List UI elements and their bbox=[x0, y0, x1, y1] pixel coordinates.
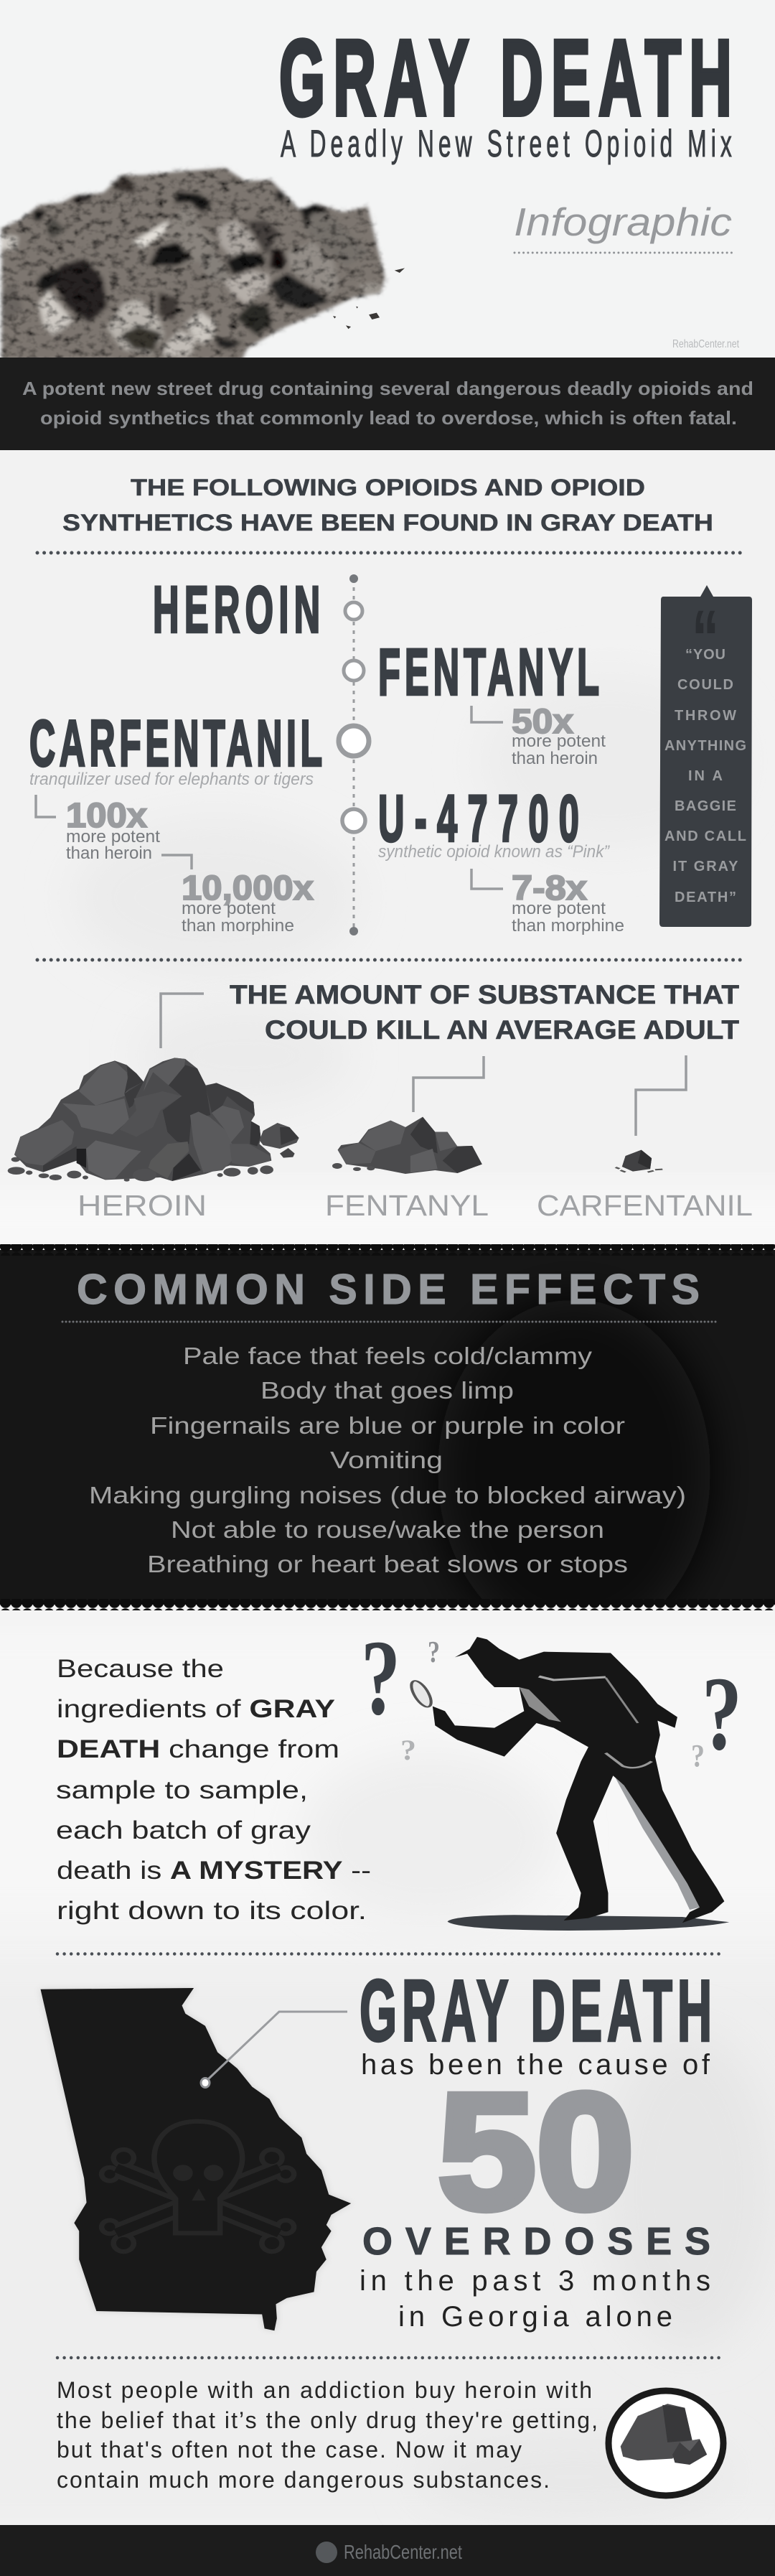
quote callout: COULD bbox=[677, 677, 733, 693]
text: closing paragraph: Most people with an addiction buy heroin with bbox=[57, 2377, 592, 2403]
heading: lethal amounts: COULD KILL AN AVERAGE ADULT bbox=[265, 1015, 739, 1045]
side effects list bbox=[89, 1343, 686, 1577]
image: rubble pile photo bbox=[0, 167, 405, 361]
icon: question marks: ? bbox=[691, 1738, 705, 1773]
rock labels bbox=[78, 1189, 753, 1222]
quote callout: DEATH” bbox=[675, 890, 736, 905]
drug: U-47700 bbox=[378, 781, 624, 935]
quote callout: THROW bbox=[675, 708, 736, 724]
drug: U-47700: synthetic opioid known as “Pink” bbox=[378, 842, 610, 862]
quote callout: ANYTHING bbox=[664, 738, 746, 754]
quote callout: “ bbox=[692, 594, 719, 683]
text: mystery paragraph: DEATH change from bbox=[57, 1735, 339, 1763]
small watermark: RehabCenter.net bbox=[672, 338, 739, 350]
subtitle: A Deadly New Street Opioid Mix bbox=[281, 123, 732, 165]
footer: RehabCenter.net bbox=[344, 2541, 462, 2563]
icon: question marks bbox=[361, 1618, 742, 1773]
quote callout: BAGGIE bbox=[675, 798, 736, 814]
drug: fentanyl bbox=[378, 635, 606, 768]
heading: lethal amounts: THE AMOUNT OF SUBSTANCE THAT bbox=[230, 980, 739, 1009]
intro banner: A potent new street drug containing several dangerous deadly opioids and bbox=[22, 378, 753, 399]
dotted rule under label bbox=[515, 251, 732, 254]
text: mystery paragraph: Because the bbox=[57, 1655, 224, 1683]
infographic label: Infographic bbox=[514, 200, 732, 244]
drug: carfentanil: more potent bbox=[182, 899, 276, 918]
drug: U-47700: U-47700 bbox=[378, 781, 579, 855]
stat: gray death overdoses: OVERDOSES bbox=[362, 2220, 710, 2263]
side effects list: Not able to rouse/wake the person bbox=[171, 1516, 604, 1543]
text: closing paragraph: but that's often not the case. Now it may bbox=[57, 2437, 522, 2463]
drug: carfentanil: than heroin bbox=[66, 844, 152, 863]
drug: fentanyl: than heroin bbox=[512, 749, 598, 768]
intro banner bbox=[0, 358, 775, 450]
drug: carfentanil: than morphine bbox=[182, 916, 294, 935]
stat: gray death overdoses: in the past 3 months bbox=[360, 2265, 710, 2297]
stat: gray death overdoses bbox=[360, 1961, 712, 2333]
stat: gray death overdoses: GRAY DEATH bbox=[360, 1961, 712, 2060]
title: GRAY DEATH bbox=[279, 17, 732, 138]
text: mystery paragraph: each batch of gray bbox=[56, 1816, 311, 1844]
drug: U-47700: than morphine bbox=[512, 916, 624, 935]
side effects list: Breathing or heart beat slows or stops bbox=[147, 1551, 628, 1577]
quote callout: IN A bbox=[688, 768, 723, 784]
icon: detective silhouette bbox=[408, 1637, 729, 1931]
text: mystery paragraph: right down to its color. bbox=[57, 1897, 367, 1925]
drug: carfentanil bbox=[29, 707, 322, 935]
rock labels: CARFENTANIL bbox=[537, 1189, 753, 1222]
side effects list: Body that goes limp bbox=[260, 1377, 514, 1404]
text: mystery paragraph: death is A MYSTERY -- bbox=[57, 1857, 371, 1885]
stat: gray death overdoses: in Georgia alone bbox=[398, 2301, 672, 2333]
drug: carfentanil: tranquilizer used for elephants or tigers bbox=[29, 770, 314, 789]
stat: gray death overdoses: 50 bbox=[438, 2059, 634, 2244]
side effects list: Pale face that feels cold/clammy bbox=[183, 1343, 593, 1369]
drug: U-47700: more potent bbox=[512, 899, 606, 918]
text: mystery paragraph: sample to sample, bbox=[56, 1776, 308, 1804]
quote callout bbox=[659, 585, 752, 927]
timeline bbox=[339, 574, 369, 935]
panel: common side effects bbox=[0, 1244, 775, 1644]
side effects heading: COMMON SIDE EFFECTS bbox=[77, 1266, 700, 1313]
drug: fentanyl: more potent bbox=[512, 732, 606, 751]
icon: question marks: ? bbox=[702, 1655, 742, 1772]
stat: gray death overdoses: has been the cause of bbox=[361, 2049, 710, 2081]
heading: opioids found: SYNTHETICS HAVE BEEN FOUND IN GRAY DEATH bbox=[62, 510, 713, 536]
intro banner: opioid synthetics that commonly lead to overdose, which is often fatal. bbox=[40, 407, 737, 429]
footer bbox=[0, 2525, 775, 2576]
text: mystery paragraph bbox=[56, 1655, 371, 1925]
rock pile: heroin bbox=[8, 1058, 299, 1182]
icon: footer logo bbox=[316, 2542, 337, 2563]
drug: fentanyl: FENTANYL bbox=[378, 635, 599, 709]
icon: question marks: ? bbox=[428, 1636, 440, 1669]
heading: opioids found bbox=[62, 475, 713, 536]
quote callout: AND CALL bbox=[664, 829, 746, 844]
drug: fentanyl: 50x bbox=[512, 703, 573, 741]
drug: carfentanil: 100x bbox=[66, 797, 147, 835]
text: closing paragraph bbox=[57, 2377, 598, 2493]
rock labels: FENTANYL bbox=[325, 1189, 489, 1222]
text: closing paragraph: contain much more dangerous substances. bbox=[57, 2467, 550, 2493]
rock labels: HEROIN bbox=[78, 1189, 207, 1222]
drug: carfentanil: CARFENTANIL bbox=[29, 707, 322, 780]
drug: carfentanil: more potent bbox=[66, 827, 160, 846]
side effects list: Making gurgling noises (due to blocked airway) bbox=[89, 1482, 686, 1508]
quote callout: “YOU bbox=[685, 647, 725, 663]
icon: question marks: ? bbox=[400, 1734, 416, 1766]
side effects list: Fingernails are blue or purple in color bbox=[150, 1412, 625, 1439]
drug: U-47700: 7-8x bbox=[512, 869, 587, 907]
rock: carfentanil bbox=[616, 1150, 662, 1172]
rock pile: fentanyl bbox=[332, 1117, 482, 1174]
side effects list: Vomiting bbox=[330, 1447, 443, 1473]
text: mystery paragraph: ingredients of GRAY bbox=[57, 1695, 335, 1723]
text: closing paragraph: the belief that it’s the only drug they're getting, bbox=[57, 2407, 598, 2433]
map: Georgia with skull bbox=[40, 1988, 351, 2330]
icon: skull and crossbones bbox=[99, 2122, 296, 2254]
drug: heroin: HEROIN bbox=[153, 572, 320, 646]
icon: coal badge bbox=[609, 2391, 723, 2496]
callout line and map pin bbox=[201, 2012, 347, 2088]
drug: carfentanil: 10,000x bbox=[182, 869, 314, 907]
quote callout: IT GRAY bbox=[673, 859, 738, 874]
connector lines bbox=[161, 994, 686, 1136]
icon: question marks: ? bbox=[361, 1618, 400, 1737]
heading: lethal amounts bbox=[230, 980, 739, 1045]
heading: opioids found: THE FOLLOWING OPIOIDS AND OPIOID bbox=[131, 475, 645, 500]
